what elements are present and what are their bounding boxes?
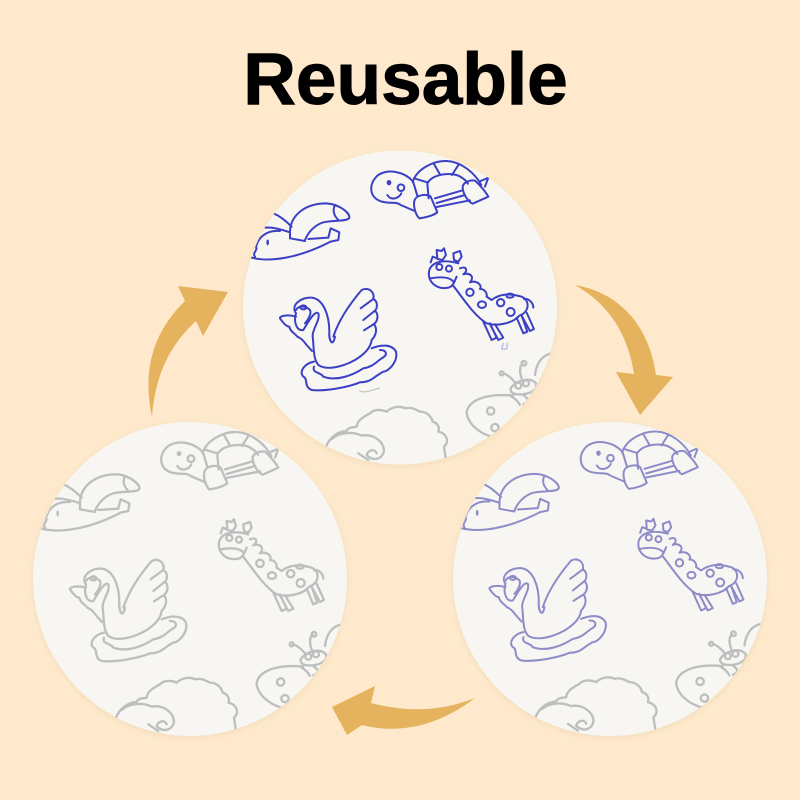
panel: left circle, erased grey drawing <box>32 422 348 738</box>
arrow: left to top <box>148 286 228 417</box>
title: Reusable <box>243 39 568 120</box>
panel: top circle, fresh blue drawing <box>242 150 558 467</box>
arrow: right to left along bottom <box>332 686 475 735</box>
panel: right circle, fading purple drawing <box>452 422 768 738</box>
arrow: top to right <box>575 285 673 415</box>
